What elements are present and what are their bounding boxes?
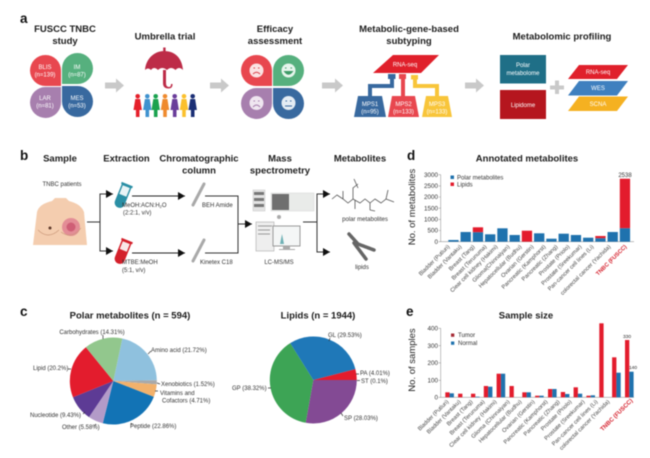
legend: Normal	[458, 341, 477, 347]
axes and ticks: 0	[434, 239, 438, 246]
box: lipidome	[500, 90, 546, 119]
subtype petals: (n=87)	[68, 72, 86, 78]
x-axis category labels: Prostate (Sreekumar)	[541, 244, 583, 287]
legend	[451, 333, 477, 347]
arrow 1	[105, 78, 124, 92]
pie labels: polar: Nucleotide (9.43%)	[30, 413, 81, 419]
value label: 2538: 2538	[618, 173, 632, 179]
subtype petals: LAR	[39, 96, 52, 102]
arrow: extraction to column, top	[132, 195, 185, 197]
heading: FUSCC TNBC study: study	[52, 36, 78, 47]
pie labels: polar: Cofactors (4.71%)	[162, 398, 210, 404]
axes and ticks: 1000	[424, 217, 438, 224]
x-axis category labels: Prostate (Priolo)	[540, 399, 573, 432]
axes and ticks	[424, 172, 634, 246]
efficacy petals with faces	[241, 55, 304, 119]
box: polar metabolome: Polar	[516, 63, 530, 69]
pie labels: lipids: GL (29.53%)	[328, 333, 362, 339]
diagram: RNA-seq to MPS subtypes: RNA-seq	[393, 62, 417, 68]
x-axis category labels: Pancreatic (Zhang)	[523, 399, 561, 438]
heading: Efficacy assessment: assessment	[248, 36, 303, 47]
icon: red tube	[113, 238, 133, 265]
omics parallelograms: RNA-seq	[586, 70, 610, 76]
arrow 3	[322, 78, 343, 92]
legend: Lipids	[457, 182, 473, 188]
grouped bars	[445, 323, 634, 397]
pie labels: polar: Carbohydrates (14.31%)	[59, 330, 125, 336]
diagram: RNA-seq to MPS subtypes	[354, 55, 452, 117]
heading: Mass spectrometry: Mass	[268, 154, 292, 164]
panel b: experimental workflow	[20, 148, 394, 274]
text: BEH Amide: BEH Amide	[202, 203, 233, 209]
icon: polar metabolite molecule	[332, 179, 394, 211]
icon: blue tube	[113, 182, 133, 209]
omics parallelograms: SCNA	[590, 102, 606, 108]
axes and ticks: 0	[434, 394, 438, 402]
legend: Polar metabolites	[457, 176, 503, 182]
box: polar metabolome	[500, 55, 546, 84]
x-axis category labels: Ovarian (Gerstin)	[501, 399, 536, 434]
heading: Extraction: Extraction	[103, 154, 150, 164]
box: polar metabolome: metabolome	[506, 71, 540, 77]
x-axis category labels: Pancreatic (Kamphorst)	[503, 399, 549, 446]
icon: patients row	[134, 94, 197, 117]
text: extraction solvents 2: MTBE:MeOH	[122, 260, 158, 266]
x-axis category labels: Prostate (Sreekumar)	[544, 399, 586, 442]
value label: 330: 330	[623, 334, 631, 340]
subtype petals: (n=81)	[36, 104, 54, 110]
x-axis category labels: Clear cell kidney (Hakimi)	[450, 244, 499, 294]
heading: Metabolites: Metabolites	[334, 154, 386, 164]
text: extraction solvents 1: (2:2:1, v/v)	[123, 210, 151, 216]
icon: lipids	[349, 234, 374, 259]
x-axis category labels: TNBC (FUSCC)	[595, 244, 628, 277]
box: lipidome: Lipidome	[511, 103, 536, 109]
omics parallelograms	[568, 65, 628, 111]
value label: 140: 140	[629, 365, 637, 371]
pie labels: lipids: ST (0.1%)	[361, 379, 388, 385]
axes and ticks: 300	[427, 343, 438, 350]
x-axis category labels: Pancreatic (Zhang)	[521, 244, 559, 283]
x-axis category labels: Bladder (Putluri)	[417, 399, 450, 432]
heading: Polar metabolites: Polar metabolites (n = 594)	[70, 310, 190, 322]
x-axis category labels: colorectal cancer (Yachida)	[559, 399, 611, 452]
heading: Umbrella trial: Umbrella trial	[135, 32, 195, 42]
text: extraction solvents 1: MeOH:ACN:H	[122, 203, 160, 209]
text: Kinetex C18: Kinetex C18	[200, 260, 233, 266]
subtype petals: MES	[70, 96, 84, 102]
x-axis category labels: Breast (Tang)	[448, 244, 476, 273]
omics parallelograms: WES	[591, 86, 605, 92]
x-axis category labels: Clear cell kidney (Hakimi)	[449, 399, 498, 449]
text: extraction solvents 2: (5:1, v/v)	[122, 268, 145, 274]
subtype petals: (n=139)	[35, 72, 55, 78]
x-axis category labels: Pan-cancer cell lines (Li)	[551, 399, 599, 447]
axes and ticks: 3000	[424, 172, 438, 179]
heading: Sample: Sample	[43, 154, 77, 164]
x-axis category labels: Ovarian (Gerstin)	[500, 244, 535, 279]
pie labels: lipids	[232, 333, 390, 422]
x-axis category labels: Bladder (Putluri)	[418, 244, 451, 277]
x-axis category labels: Breast (Terunuma)	[451, 244, 488, 282]
subtype petals: (n=53)	[68, 104, 86, 110]
text: extraction solvents 1: 2	[160, 204, 163, 209]
pie labels: polar: Peptide (22.86%)	[130, 424, 176, 430]
diagram: RNA-seq to MPS subtypes: MPS3	[429, 102, 446, 108]
diagram: RNA-seq to MPS subtypes: (n=95)	[361, 110, 379, 116]
stacked bars	[448, 179, 630, 242]
text: LC-MS/MS: LC-MS/MS	[264, 260, 294, 266]
text: lipids: lipids	[355, 265, 369, 271]
heading: Lipids: Lipids (n = 1944)	[281, 310, 355, 322]
diagram: RNA-seq to MPS subtypes: (n=133)	[427, 110, 447, 116]
label b: b	[20, 148, 28, 163]
connector to metabolites, lower branch	[303, 222, 330, 252]
x-axis category labels: Glioma(Chinnaiyan)	[472, 244, 511, 284]
x-axis category labels: Bladder (Vantaku)	[427, 244, 463, 281]
axes and ticks: 2500	[424, 183, 438, 190]
heading: Mass spectrometry: spectrometry	[250, 166, 311, 176]
panel a: workflow	[20, 11, 628, 119]
axes and ticks	[427, 326, 634, 402]
arrows: sample to extraction	[87, 194, 113, 251]
legend: Tumor	[458, 333, 475, 339]
heading: Metabolomic profiling: Metabolomic profiling	[513, 32, 612, 42]
x-axis category labels: Breast (Tang)	[446, 399, 474, 428]
pie labels: lipids: PA (4.01%)	[360, 371, 390, 377]
label a: a	[20, 11, 28, 26]
legend	[450, 176, 503, 188]
x-axis category labels: Breast (Terunuma)	[449, 399, 486, 437]
label c: c	[20, 304, 28, 319]
pie labels: polar: Amino acid (21.72%)	[151, 348, 207, 354]
icon: column bottom	[193, 240, 204, 261]
x-axis category labels: Pancreatic (Kamphorst)	[501, 244, 547, 291]
text: TNBC patients: TNBC patients	[42, 182, 82, 188]
axes and ticks: 500	[427, 228, 438, 235]
x-axis category labels: TNBC (FUSCC)	[600, 398, 634, 433]
heading: Annotated metabolites: Annotated metabolites	[476, 154, 578, 164]
pie: lipids	[270, 336, 357, 423]
x-axis category labels	[418, 244, 628, 297]
axes and ticks: 100	[427, 378, 438, 384]
x-axis category labels: Hepatocellular (Budhu)	[478, 399, 523, 445]
pie labels: lipids: SP (28.03%)	[344, 416, 378, 422]
axes and ticks: 200	[427, 360, 438, 367]
x-axis category labels	[417, 398, 634, 452]
heading: Metabolic-gene-based subtyping: subtyping	[386, 36, 432, 47]
pie labels: lipids: GP (38.32%)	[232, 386, 267, 392]
label e: e	[406, 304, 414, 319]
x-axis category labels: Glioma (Chinnaiyan)	[471, 399, 511, 440]
text: extraction solvents 1: O	[162, 203, 167, 209]
arrow: extraction to column, bottom	[132, 252, 185, 254]
heading: Sample size: Sample size	[499, 310, 553, 322]
label d: d	[407, 148, 415, 163]
x-axis category labels: Prostate (Priolo)	[538, 244, 571, 277]
axes and ticks: 2000	[424, 194, 438, 201]
y-axis title: No. of metabolites	[407, 168, 418, 245]
heading: Chromatographic column: Chromatographic	[159, 154, 239, 164]
diagram: RNA-seq to MPS subtypes: (n=133)	[393, 110, 414, 116]
y-axis title: No. of samples	[407, 328, 418, 392]
arrow 4	[465, 78, 484, 92]
pie: polar metabolites	[70, 338, 157, 424]
illustration: LC-MS/MS instruments	[253, 190, 314, 251]
icon: plus	[550, 80, 564, 94]
connector to mass spec	[205, 196, 252, 253]
heading: FUSCC TNBC study: FUSCC TNBC	[34, 24, 96, 35]
pie labels: polar: Other (5.58%)	[62, 425, 100, 431]
icon: column top	[193, 184, 204, 205]
diagram: RNA-seq to MPS subtypes: MPS2	[395, 102, 412, 108]
pie labels: polar: Lipid (20.2%)	[33, 366, 68, 372]
icon: umbrella	[145, 48, 183, 88]
x-axis category labels: Bladder (Vantaku)	[426, 399, 462, 436]
pie labels: polar	[30, 330, 215, 431]
x-axis category labels: colorectal cancer (Yachida)	[560, 244, 612, 297]
x-axis category labels: Hepatocellular (Budhu)	[478, 244, 523, 290]
heading: Efficacy assessment: Efficacy	[257, 24, 293, 35]
axes and ticks: 400	[427, 326, 438, 332]
panel e: sample size chart	[406, 304, 637, 452]
heading: Metabolic-gene-based subtyping: Metabolic-gene-based	[359, 24, 459, 35]
pie labels: polar: Vitamins and	[160, 391, 195, 397]
panel c: pie charts	[20, 304, 390, 431]
subtype petals: BLIS	[38, 65, 52, 71]
diagram: RNA-seq to MPS subtypes: MPS1	[362, 102, 379, 108]
subtype petals: IM	[74, 65, 80, 71]
x-axis category labels: Pan-cancer cell lines (Li)	[547, 244, 595, 292]
connector arrow top	[317, 194, 330, 222]
subtype petals	[30, 53, 93, 118]
text: polar metabolites: polar metabolites	[342, 217, 388, 223]
pie labels: polar: Xenobiotics (1.52%)	[161, 382, 215, 388]
axes and ticks: 1500	[424, 205, 438, 212]
heading: Chromatographic column: column	[182, 166, 216, 176]
panel d: annotated metabolites chart	[407, 148, 634, 297]
arrow 2	[210, 78, 229, 92]
illustration: torso	[33, 198, 87, 245]
